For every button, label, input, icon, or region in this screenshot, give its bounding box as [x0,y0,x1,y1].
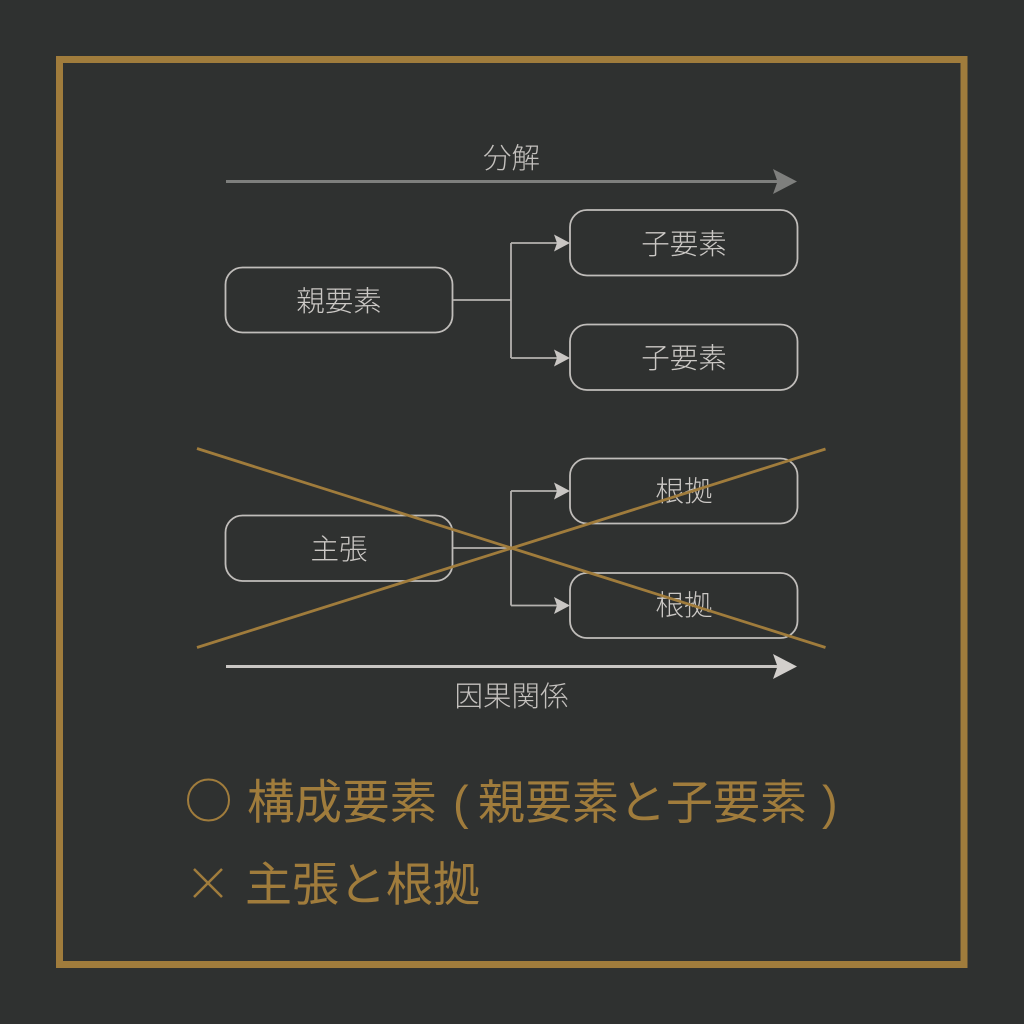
text: incorrect example: 主張と根拠 [245,858,480,911]
text: correct example: ) [822,776,838,829]
icon: cross [194,869,222,897]
box: parent element: 親要素 [296,286,382,318]
arrow: causality [226,654,797,679]
text: correct example [247,776,838,830]
box: child element 2 [570,324,798,390]
box: evidence 2 [570,573,798,638]
box: claim: 主張 [310,534,368,566]
label: causality: 因果関係 [454,681,569,713]
box: evidence 2: 根拠 [655,590,713,622]
connector: claim to evidence [453,482,570,614]
arrow: decomposition [226,169,797,194]
icon: circle [188,780,229,820]
box: claim [226,516,452,581]
connector: parent to children [453,234,570,366]
text: correct example: 親要素と子要素 [478,776,807,829]
box: child element 2: 子要素 [641,343,727,375]
box: child element 1 [570,210,798,276]
box: evidence 1 [570,458,798,524]
box: child element 1: 子要素 [641,229,727,261]
box: parent element [226,268,452,332]
gold frame [60,60,964,964]
label: decomposition: 分解 [483,143,540,175]
box: evidence 1: 根拠 [655,476,713,508]
text: correct example: ( [453,776,469,829]
text: correct example: 構成要素 [247,777,437,830]
cross-out lines [197,448,826,648]
